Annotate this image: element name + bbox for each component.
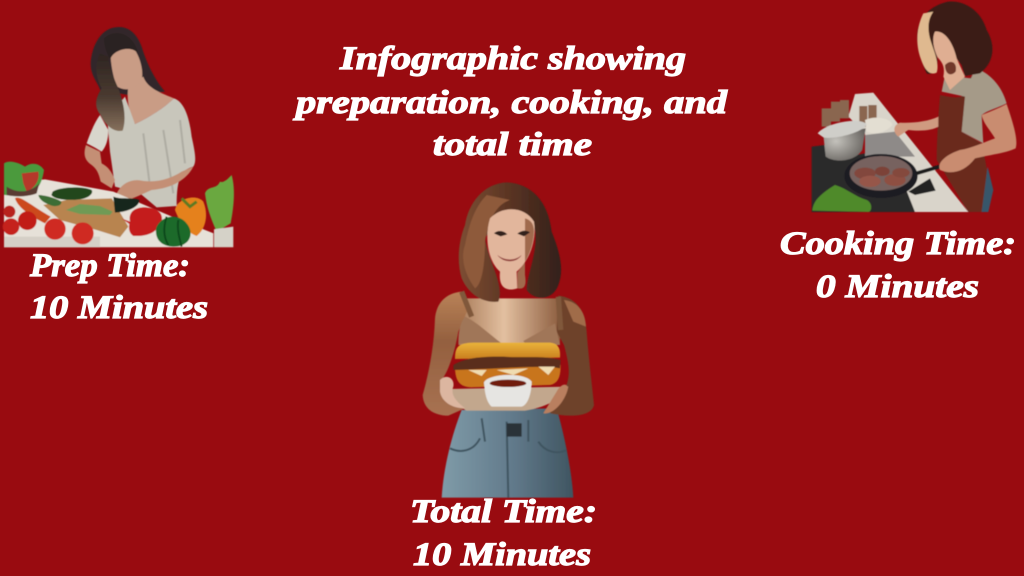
pan [844, 154, 918, 198]
plate [448, 387, 568, 411]
label: total time [410, 494, 597, 573]
title: preparation, cooking, and [292, 85, 728, 121]
chest [458, 298, 560, 345]
patties [854, 168, 876, 179]
lettuce [205, 175, 234, 232]
label: prep time: 10 Minutes [30, 290, 208, 326]
carrots [15, 198, 51, 223]
straps and top [462, 292, 561, 330]
illustration: woman holding sandwich [423, 182, 594, 498]
sandwich bun [455, 343, 560, 359]
illustration: woman chopping vegetables [3, 27, 234, 247]
hands [440, 377, 465, 408]
cucumbers [51, 187, 92, 200]
salad bowl [4, 162, 44, 196]
hair [459, 182, 561, 302]
spice jars [822, 100, 877, 128]
cutting board [43, 198, 128, 237]
t-shirt [942, 68, 1007, 143]
label: cooking time: Cooking Time: [780, 226, 1016, 262]
face and neck [933, 32, 965, 90]
label: cooking time: 0 Minutes [816, 269, 979, 305]
neck and chest [128, 77, 174, 124]
arms [894, 117, 938, 137]
label: prep time [29, 248, 208, 326]
lettuce [812, 185, 871, 212]
label: total time: Total Time: [410, 494, 597, 530]
sandwich filling [453, 357, 561, 370]
arms [85, 145, 115, 188]
hair [917, 2, 992, 76]
label: prep time: Prep Time: [29, 248, 190, 284]
face and neck [487, 209, 535, 289]
hair front [96, 53, 125, 131]
title: total time [433, 127, 592, 163]
pot [823, 128, 866, 161]
right arm [550, 296, 594, 416]
left arm [423, 292, 468, 416]
title: Infographic showing [339, 41, 686, 77]
tomatoes [3, 206, 15, 218]
orange pepper [175, 198, 206, 236]
illustration: woman cooking at stove [812, 2, 1016, 212]
title [292, 41, 728, 163]
apron and lower body [937, 75, 989, 212]
jeans [442, 408, 573, 498]
table [4, 179, 213, 247]
counter [848, 93, 968, 212]
red pepper [122, 207, 162, 236]
label: cooking time [780, 226, 1016, 305]
green pepper [156, 217, 191, 247]
stove [812, 145, 915, 212]
shirt [107, 97, 195, 207]
pan handle [917, 166, 942, 173]
hair back [91, 27, 165, 95]
label: total time: 10 Minutes [413, 537, 591, 573]
face [111, 49, 142, 89]
ramekin with sauce [484, 375, 532, 407]
